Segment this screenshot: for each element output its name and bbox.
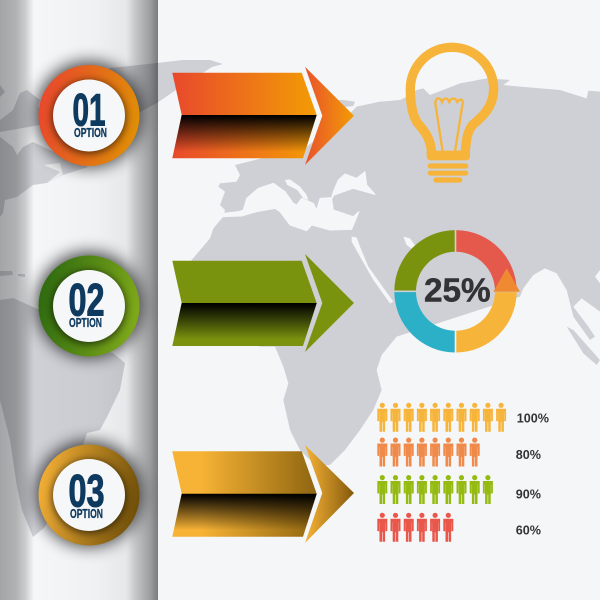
- icon: orange triangle: [493, 268, 520, 292]
- badge 01: [36, 62, 142, 168]
- pictogram row 90%: 90%: [516, 488, 541, 502]
- pictogram row 80%: [377, 438, 541, 466]
- panel: left vertical strip: [0, 0, 158, 600]
- world map: [0, 60, 600, 537]
- pictogram row 60%: [377, 513, 541, 542]
- pictogram row 60%: 60%: [516, 523, 541, 537]
- badge 03: OPTION: [70, 507, 103, 521]
- badge 03: [36, 441, 142, 547]
- badge 01: 01: [72, 84, 106, 136]
- donut chart: [394, 230, 520, 352]
- donut value: 25%: [424, 273, 491, 310]
- pictogram row 100%: [377, 403, 549, 432]
- Mediterranean and Black Sea: [218, 172, 375, 231]
- badge 02: [36, 252, 142, 358]
- arrow 01: [172, 67, 354, 165]
- arrow 02: [172, 254, 354, 352]
- pictogram row 90%: [377, 475, 541, 504]
- badge 02: 02: [68, 274, 104, 326]
- arrow 03: [172, 445, 354, 543]
- badge 03: 03: [68, 466, 104, 516]
- icon: light bulb: [410, 47, 494, 183]
- pictogram row 80%: 80%: [516, 448, 541, 462]
- badge 02: OPTION: [69, 316, 102, 330]
- pictogram row 100%: 100%: [517, 412, 549, 426]
- badge 01: OPTION: [74, 126, 107, 140]
